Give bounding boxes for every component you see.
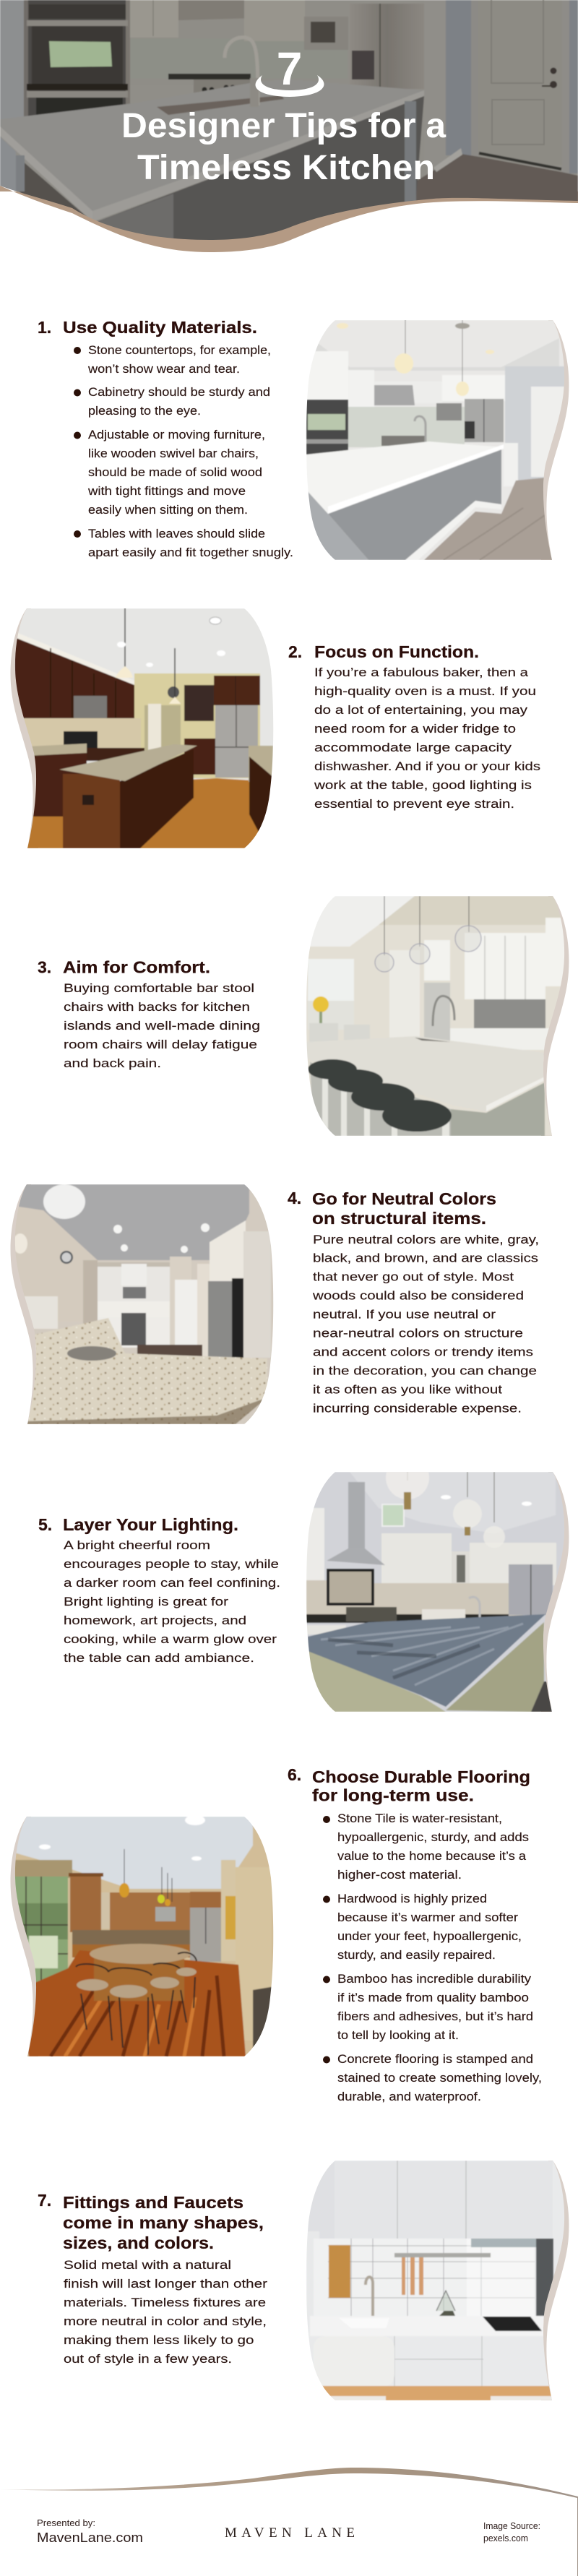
brown wave band: [0, 186, 578, 252]
body text 5: [64, 1538, 280, 1665]
heading 6: [288, 1765, 530, 1805]
body text 2: If you’re a fabulous baker, then a: [314, 665, 529, 679]
bullet list 1: pleasing to the eye.: [88, 404, 201, 418]
bullet list 1: easily when sitting on them.: [88, 503, 248, 517]
body text 3: chairs with backs for kitchen: [64, 1000, 250, 1014]
heading 6: for long-term use.: [312, 1786, 474, 1805]
presented by: Presented by:: [37, 2517, 95, 2528]
body text 2: accommodate large capacity: [314, 741, 512, 754]
heading 4: Go for Neutral Colors: [312, 1189, 496, 1208]
body text 2: work at the table, good lighting is: [314, 778, 532, 792]
heading 4: on structural items.: [312, 1209, 486, 1228]
section 6: durable flooring: [0, 1765, 542, 2103]
body text 4: that never go out of style. Most: [313, 1270, 514, 1283]
heading 7: Fittings and Faucets: [63, 2193, 243, 2212]
bullet list 6: because it’s warmer and softer: [337, 1911, 518, 1924]
photo: dark wood kitchen: [0, 605, 275, 848]
body text 4: in the decoration, you can change: [313, 1364, 537, 1377]
body text 2: essential to prevent eye strain.: [314, 797, 514, 811]
bullet list 1: Tables with leaves should slide: [88, 527, 265, 540]
body text 7: [64, 2258, 267, 2366]
body text 3: Buying comfortable bar stool: [64, 981, 254, 995]
image source: pexels.com: [483, 2533, 528, 2543]
body text 3: [64, 981, 260, 1070]
body text 2: need room for a wider fridge to: [314, 722, 516, 736]
body text 7: out of style in a few years.: [64, 2352, 232, 2366]
photo: granite kitchen: [0, 1184, 275, 1424]
bullet list 1: Adjustable or moving furniture,: [88, 428, 265, 441]
bullet list 6: Concrete flooring is stamped and: [337, 2052, 533, 2066]
body text 7: finish will last longer than other: [64, 2277, 267, 2291]
footer: [0, 2468, 578, 2576]
body text 3: islands and well-made dining: [64, 1019, 260, 1033]
body text 4: near-neutral colors on structure: [313, 1327, 523, 1340]
photo: blue granite island kitchen: [306, 1456, 569, 1712]
footer wave: [0, 2468, 578, 2576]
body text 7: making them less likely to go: [64, 2333, 254, 2347]
body text 5: the table can add ambiance.: [64, 1651, 254, 1665]
body text 4: and accent colors or trendy items: [313, 1345, 533, 1358]
number 7 badge: [256, 43, 324, 97]
hero kitchen photo: [0, 0, 578, 251]
heading 1: Use Quality Materials.: [63, 318, 257, 337]
body text 3: and back pain.: [64, 1056, 161, 1070]
body text 5: homework, art projects, and: [64, 1614, 246, 1627]
image source: Image Source:: [483, 2521, 540, 2531]
body text 2: do a lot of entertaining, you may: [314, 703, 528, 717]
bullet list 6: Bamboo has incredible durability: [337, 1972, 532, 1986]
heading 2: 2.: [288, 642, 302, 661]
header hero: [0, 0, 578, 252]
body text 7: more neutral in color and style,: [64, 2314, 267, 2328]
bullet list 6: stained to create something lovely,: [337, 2071, 542, 2085]
bullet list 6: to tell by looking at it.: [337, 2028, 459, 2042]
bullet list 1: like wooden swivel bar chairs,: [88, 447, 259, 460]
heading 7: come in many shapes,: [63, 2213, 264, 2232]
number 7 badge: 7: [277, 43, 302, 95]
presented by: [37, 2517, 143, 2545]
body text 4: black, and brown, and are classics: [313, 1252, 538, 1265]
bullet list 6: if it’s made from quality bamboo: [337, 1991, 529, 2004]
bullet list 1: Stone countertops, for example,: [88, 343, 271, 357]
bullet list 6: [323, 1812, 542, 2103]
bullet list 1: should be made of solid wood: [88, 465, 262, 479]
body text 4: Pure neutral colors are white, gray,: [313, 1233, 539, 1246]
bullet list 1: [74, 343, 293, 559]
title: [121, 107, 446, 187]
heading 5: 5.: [38, 1515, 52, 1534]
heading 7: sizes, and colors.: [63, 2233, 214, 2252]
bullet list 6: higher-cost material.: [337, 1868, 462, 1882]
heading 6: Choose Durable Flooring: [312, 1767, 530, 1786]
bullet list 6: durable, and waterproof.: [337, 2090, 481, 2103]
heading 2: Focus on Function.: [314, 642, 479, 661]
bullet list 1: with tight fittings and move: [87, 484, 246, 498]
title: Timeless Kitchen: [137, 149, 435, 187]
body text 2: high-quality oven is a must. If you: [314, 684, 536, 698]
body text 5: Bright lighting is great for: [64, 1595, 228, 1608]
body text 3: room chairs will delay fatigue: [64, 1038, 257, 1051]
heading 4: [288, 1189, 496, 1228]
bullet list 6: sturdy, and easily repaired.: [337, 1948, 496, 1962]
heading 1: 1.: [38, 318, 51, 337]
section 7: fittings and faucets: [38, 2161, 569, 2400]
section 2: focus on function: [0, 605, 540, 848]
body text 7: Solid metal with a natural: [64, 2258, 231, 2272]
body text 2: dishwasher. And if you or your kids: [314, 759, 540, 773]
body text 4: it as often as you like without: [313, 1383, 502, 1396]
body text 4: incurring considerable expense.: [313, 1402, 522, 1415]
heading 3: 3.: [38, 958, 51, 977]
body text 5: a darker room can feel confining.: [64, 1576, 280, 1590]
body text 4: neutral. If you use neutral or: [313, 1308, 496, 1321]
heading 4: 4.: [288, 1189, 301, 1207]
photo: white kitchen with stools: [306, 896, 569, 1136]
photo: minimal white kitchen: [306, 2161, 569, 2400]
section 1: use quality materials: [38, 316, 569, 560]
bullet list 1: Cabinetry should be sturdy and: [88, 385, 270, 399]
image source: [483, 2521, 540, 2543]
title: Designer Tips for a: [121, 107, 446, 145]
photo: warm wood kitchen: [0, 1815, 275, 2056]
body text 2: [314, 665, 540, 811]
body text 5: encourages people to stay, while: [64, 1557, 279, 1571]
bullet list 1: apart easily and fit together snugly.: [88, 546, 293, 559]
heading 6: 6.: [288, 1765, 301, 1784]
maven lane logo: MAVEN LANE: [225, 2525, 355, 2541]
bullet list 6: value to the home because it’s a: [337, 1849, 527, 1863]
bullet list 1: won’t show wear and tear.: [87, 362, 240, 376]
body text 4: woods could also be considered: [312, 1289, 524, 1302]
body text 5: cooking, while a warm glow over: [64, 1632, 277, 1646]
photo: white kitchen: [306, 316, 569, 560]
heading 3: Aim for Comfort.: [63, 958, 210, 977]
bullet list 6: under your feet, hypoallergenic,: [337, 1929, 522, 1943]
bullet list 6: fibers and adhesives, but it’s hard: [337, 2009, 533, 2023]
section 4: neutral colors: [0, 1184, 539, 1424]
presented by: MavenLane.com: [37, 2530, 143, 2545]
heading 5: Layer Your Lighting.: [63, 1515, 238, 1534]
heading 7: 7.: [38, 2191, 51, 2210]
body text 7: materials. Timeless fixtures are: [64, 2296, 266, 2309]
bullet list 6: hypoallergenic, sturdy, and adds: [337, 1830, 529, 1844]
bullet list 6: Hardwood is highly prized: [337, 1892, 487, 1905]
section 5: layer your lighting: [38, 1456, 569, 1712]
heading 7: [38, 2191, 264, 2252]
bullet list 6: Stone Tile is water-resistant,: [337, 1812, 502, 1825]
section 3: aim for comfort: [38, 896, 569, 1136]
body text 4: [312, 1233, 539, 1415]
body text 5: A bright cheerful room: [64, 1538, 210, 1552]
